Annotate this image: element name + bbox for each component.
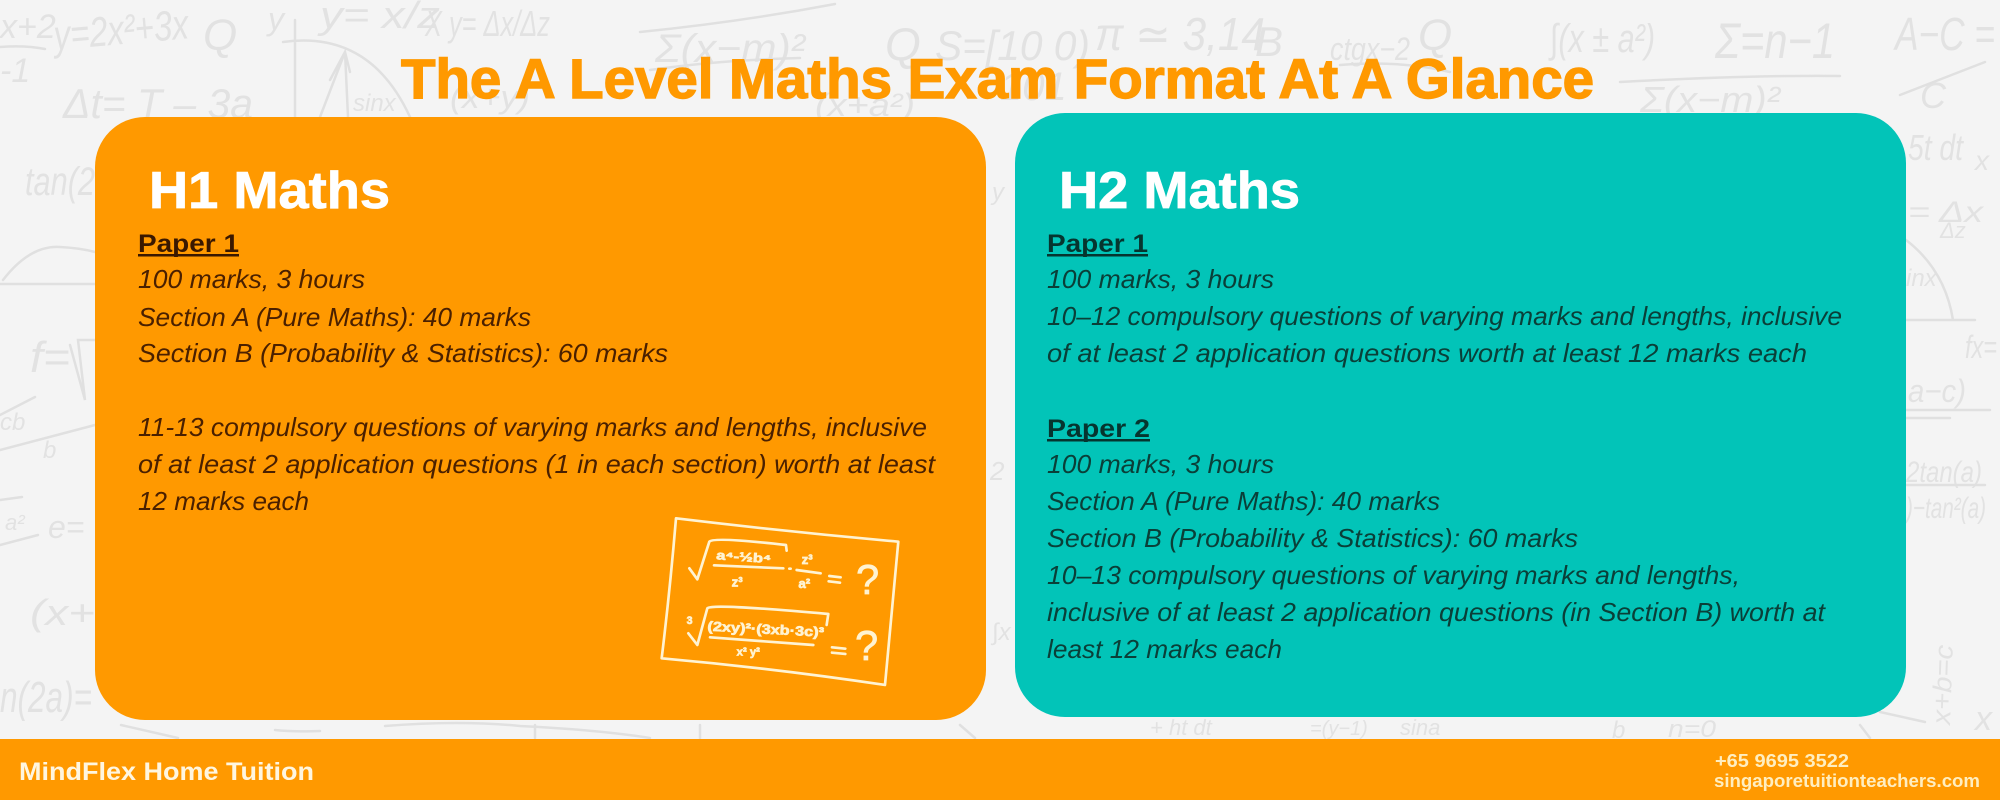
background: handwritten maths formulas: ∫(x ± a²) (1548, 17, 1655, 61)
background: handwritten maths formulas: x+b=c (1926, 644, 1959, 727)
icon: hand-drawn maths equations card: z³ (802, 552, 813, 567)
text block: H1 Paper 1 details (138, 264, 937, 516)
background: handwritten maths formulas: B (1255, 18, 1283, 65)
background: handwritten maths formulas: Δz (1939, 218, 1966, 243)
background: handwritten maths formulas: Σ=n−1 (1714, 13, 1835, 69)
background: handwritten maths formulas: inx (1906, 265, 1938, 292)
icon: hand-drawn maths equations card: a² (798, 576, 811, 591)
background: handwritten maths formulas: sina (1400, 715, 1440, 740)
text block: H2 Paper 1 details (1047, 264, 1842, 368)
text block: H1 Paper 1 details: of at least 2 application questions (1 in each section) worth at least (138, 449, 937, 479)
text block: H1 Paper 1 details: Section A (Pure Maths): 40 marks (138, 302, 531, 332)
background: handwritten maths formulas: C (1920, 75, 1947, 116)
text block: H1 Paper 1 details: 11-13 compulsory questions of varying marks and lengths, inclusive (138, 412, 927, 442)
background: handwritten maths formulas: S=[10 0) (935, 22, 1090, 69)
text block: H2 Paper 2 details (1047, 449, 1827, 664)
text block: H2 Paper 2 details: 100 marks, 3 hours (1047, 449, 1274, 479)
text block: H2 Paper 2 details: Section A (Pure Maths): 40 marks (1047, 486, 1440, 516)
panel: H1 Maths (95, 117, 986, 720)
footer brand name: MindFlex Home Tuition (19, 758, 314, 786)
subheading: H2 Paper 2: Paper 2 (1047, 415, 1150, 443)
title: The A Level Maths Exam Format At A Glance (401, 47, 1594, 110)
background: handwritten maths formulas: y (990, 179, 1006, 206)
background: handwritten maths formulas: (x+y) (450, 79, 530, 115)
background: handwritten maths formulas: 2 (989, 456, 1005, 486)
background: handwritten maths formulas: n=0 (1668, 716, 1717, 743)
icon: hand-drawn maths equations card: a⁴-½b⁴ (716, 548, 772, 566)
background: handwritten maths formulas: sinx (353, 90, 397, 117)
background: handwritten maths formulas: a² (5, 510, 25, 535)
background: handwritten maths formulas: x+2 (0, 8, 56, 46)
background: handwritten maths formulas: π ≃ 3,14 (1095, 8, 1265, 60)
text block: H2 Paper 2 details: least 12 marks each (1047, 634, 1282, 664)
text block: H2 Paper 2 details: inclusive of at least 2 application questions (in Section B) worth at (1047, 597, 1827, 627)
background: handwritten maths formulas: (x+ (30, 592, 95, 633)
icon: hand-drawn maths equations card: x² y² (737, 647, 760, 659)
icon: hand-drawn maths equations card: (2xy)²·(3xb·3c)³ (707, 619, 825, 640)
heading: H1 Maths: H1 Maths (149, 162, 390, 220)
footer contact details: singaporetuitionteachers.com (1714, 771, 1980, 791)
background: handwritten maths formulas: Q (885, 18, 921, 70)
icon: hand-drawn maths equations card: ? (856, 556, 879, 603)
text block: H2 Paper 1 details: of at least 2 application questions worth at least 12 marks each (1047, 338, 1807, 368)
background: handwritten maths formulas: Σ(x−m)² (1639, 79, 1782, 120)
heading: H2 Maths: H2 Maths (1059, 162, 1300, 220)
background: handwritten maths formulas: n(2a)= (0, 673, 92, 722)
background: handwritten maths formulas: Σ(x−m)² (654, 27, 807, 71)
background: handwritten maths formulas: + ht dt (1150, 715, 1213, 740)
footer contact details: +65 9695 3522 (1715, 751, 1849, 771)
background: handwritten maths formulas: Δt= T – 3a (62, 80, 253, 127)
text block: H2 Paper 2 details: Section B (Probability & Statistics): 60 marks (1047, 523, 1578, 553)
text block: H2 Paper 1 details: 10–12 compulsory questions of varying marks and lengths, inclusive (1047, 301, 1842, 331)
background: handwritten maths formulas: X y= Δx/Δz (424, 3, 550, 44)
background: handwritten maths formulas: 5t dt (1908, 127, 1965, 168)
background: handwritten maths formulas: x (1973, 145, 1990, 176)
subheading: H2 Paper 1: Paper 1 (1047, 230, 1148, 258)
icon: hand-drawn maths equations card (662, 518, 898, 685)
icon: hand-drawn maths equations card: 3 (687, 615, 693, 627)
background: handwritten maths formulas: Q (203, 11, 237, 60)
background: handwritten maths formulas: =(y−1) (1310, 718, 1368, 740)
background: handwritten maths formulas: 2tan(a) (1905, 456, 1982, 489)
background: handwritten maths formulas: = Δx (1908, 196, 1984, 229)
background: handwritten maths formulas: Q (1418, 11, 1452, 60)
background: handwritten maths formulas: e= (48, 509, 84, 545)
background: handwritten maths formulas: (x+a²) (815, 87, 915, 123)
background: handwritten maths formulas: y (266, 1, 286, 37)
background: handwritten maths formulas: b (1612, 717, 1625, 744)
background: handwritten maths formulas: b (43, 437, 56, 464)
background: handwritten maths formulas: tan(2 (25, 160, 95, 204)
background: handwritten maths formulas: ctgx−2 (1330, 31, 1410, 67)
background: handwritten maths formulas: f= (30, 333, 70, 382)
subheading: H1 Paper 1: Paper 1 (138, 230, 239, 258)
background: handwritten maths formulas: ∫x (990, 619, 1012, 646)
footer bar (0, 739, 2000, 800)
icon: hand-drawn maths equations card: z³ (732, 575, 743, 590)
icon: hand-drawn maths equations card: ? (855, 622, 878, 669)
panel: H2 Maths (1015, 113, 1906, 717)
text block: H2 Paper 1 details: 100 marks, 3 hours (1047, 264, 1274, 294)
text block: H1 Paper 1 details: 12 marks each (138, 486, 309, 516)
background: handwritten maths formulas: cb (0, 409, 25, 436)
text block: H1 Paper 1 details: 100 marks, 3 hours (138, 264, 365, 294)
text block: H2 Paper 2 details: 10–13 compulsory questions of varying marks and lengths, (1047, 560, 1740, 590)
text block: H1 Paper 1 details: Section B (Probability & Statistics): 60 marks (138, 338, 668, 368)
background: handwritten maths formulas: x (1973, 700, 1993, 738)
background: handwritten maths formulas: -1 (0, 52, 30, 90)
background: handwritten maths formulas: 101 (1000, 65, 1067, 109)
background: handwritten maths formulas: a−c) (1908, 373, 1966, 409)
footer contact details (1714, 751, 1980, 791)
